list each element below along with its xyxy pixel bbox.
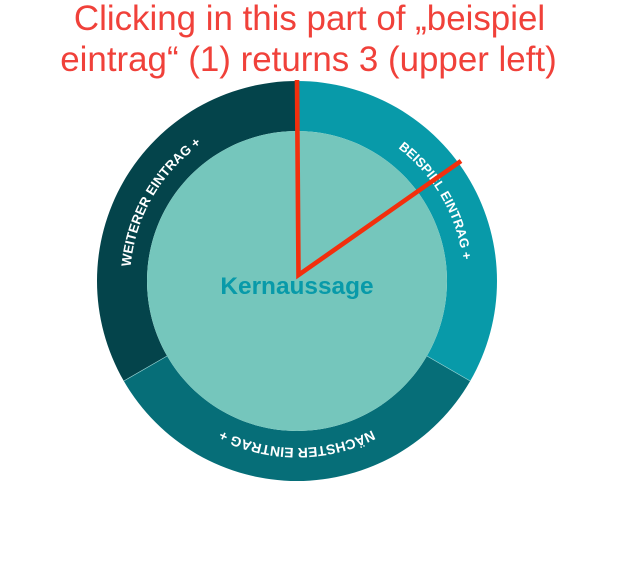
centre label: Kernaussage	[220, 273, 374, 300]
red wedge marker	[297, 80, 461, 275]
segment: nächster eintrag	[124, 356, 470, 481]
title: eintrag“ (1) returns 3 (upper left)	[60, 40, 557, 79]
title: Clicking in this part of „beispiel	[74, 0, 545, 38]
centre circle	[147, 131, 447, 431]
label: weiterer eintrag: WEITERER EINTRAG +	[121, 140, 199, 266]
segment: beispiel eintrag	[297, 81, 497, 381]
label: nächster eintrag: NÄCHSTER EINTRAG +	[220, 430, 376, 458]
title	[60, 0, 557, 79]
segment: weiterer eintrag	[97, 81, 297, 381]
label: beispiel eintrag: BEISPIEL EINTRAG +	[398, 142, 470, 259]
donut chart	[97, 81, 497, 481]
